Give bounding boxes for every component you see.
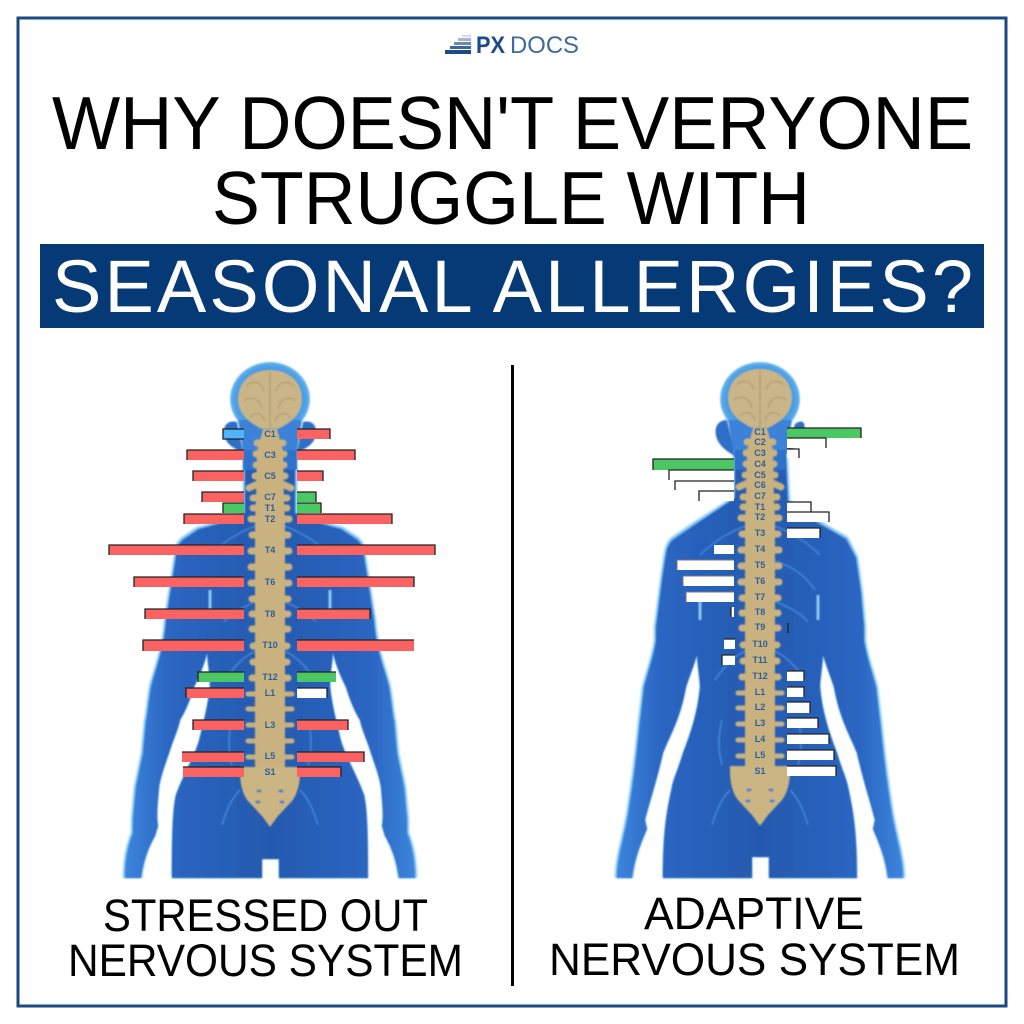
vertebra labels — [752, 427, 768, 776]
vertebra labels: T1 — [265, 503, 275, 513]
title: STRUGGLE WITH — [212, 156, 810, 240]
vertebra labels: T10 — [752, 639, 768, 649]
bar chart: right side readings — [297, 429, 435, 777]
divider — [511, 365, 514, 986]
vertebra labels: T1 — [755, 502, 765, 512]
logo wordmark: PX — [476, 32, 506, 59]
body figure — [615, 362, 905, 878]
caption: adaptive nervous system — [549, 888, 960, 985]
vertebra labels: T10 — [262, 640, 278, 650]
logo wordmark — [476, 32, 579, 59]
vertebra labels: T11 — [752, 655, 768, 665]
caption: adaptive nervous system: NERVOUS SYSTEM — [549, 934, 960, 985]
title banner: SEASONAL ALLERGIES? — [52, 245, 973, 328]
vertebra labels: C4 — [754, 459, 766, 469]
vertebra labels: C5 — [754, 470, 766, 480]
brain — [728, 369, 792, 428]
vertebra labels: T8 — [755, 607, 765, 617]
bar chart: left side readings — [109, 429, 244, 777]
vertebra labels: C3 — [264, 450, 276, 460]
vertebra labels: T2 — [265, 514, 275, 524]
vertebra labels: L1 — [755, 687, 765, 697]
vertebra labels: L5 — [265, 751, 275, 761]
title — [52, 81, 973, 240]
vertebra labels: T5 — [755, 560, 765, 570]
vertebra labels: C7 — [264, 492, 276, 502]
spine — [730, 428, 790, 826]
vertebra labels: T7 — [755, 592, 765, 602]
bar chart: right side readings — [787, 428, 861, 776]
vertebra labels: S1 — [754, 766, 766, 776]
vertebra labels: C1 — [754, 427, 766, 437]
vertebra labels: T9 — [755, 622, 765, 632]
vertebra labels: T12 — [262, 672, 278, 682]
vertebra labels: T8 — [265, 609, 275, 619]
bar chart: left side readings — [653, 459, 735, 665]
vertebra labels: T2 — [755, 512, 765, 522]
vertebra labels: L2 — [755, 702, 765, 712]
caption: stressed out nervous system: NERVOUS SYSTEM — [68, 935, 463, 986]
vertebra labels: S1 — [264, 767, 276, 777]
vertebra labels: L3 — [265, 720, 275, 730]
caption: stressed out nervous system — [68, 890, 463, 986]
title: WHY DOESN'T EVERYONE — [52, 81, 973, 165]
vertebra labels: C3 — [754, 448, 766, 458]
caption: adaptive nervous system: ADAPTIVE — [644, 888, 864, 939]
vertebra labels: L3 — [755, 718, 765, 728]
icon: ears and head — [716, 362, 805, 470]
caption: stressed out nervous system: STRESSED OUT — [103, 890, 428, 941]
logo wordmark: DOCS — [510, 32, 579, 59]
vertebra labels: T4 — [265, 545, 275, 555]
vertebra labels: T6 — [755, 576, 765, 586]
spine — [240, 429, 300, 827]
vertebra labels: C6 — [754, 480, 766, 490]
panel: stressed out nervous system — [68, 362, 463, 986]
vertebra labels: T12 — [752, 671, 768, 681]
vertebra labels — [262, 429, 278, 777]
icon: ears and head — [224, 362, 316, 470]
vertebra labels: T6 — [265, 577, 275, 587]
icon: logo stairs — [445, 35, 471, 54]
logo: PX Docs — [445, 32, 579, 59]
panel: adaptive nervous system — [549, 362, 960, 985]
body figure — [123, 362, 417, 878]
vertebra labels: L5 — [755, 750, 765, 760]
vertebra labels: C5 — [264, 471, 276, 481]
brain — [238, 370, 302, 429]
vertebra labels: C2 — [754, 437, 766, 447]
vertebra labels: L4 — [755, 734, 765, 744]
vertebra labels: L1 — [265, 688, 275, 698]
vertebra labels: T3 — [755, 528, 765, 538]
vertebra labels: C1 — [264, 429, 276, 439]
vertebra labels: T4 — [755, 544, 765, 554]
vertebra labels: C7 — [754, 491, 766, 501]
